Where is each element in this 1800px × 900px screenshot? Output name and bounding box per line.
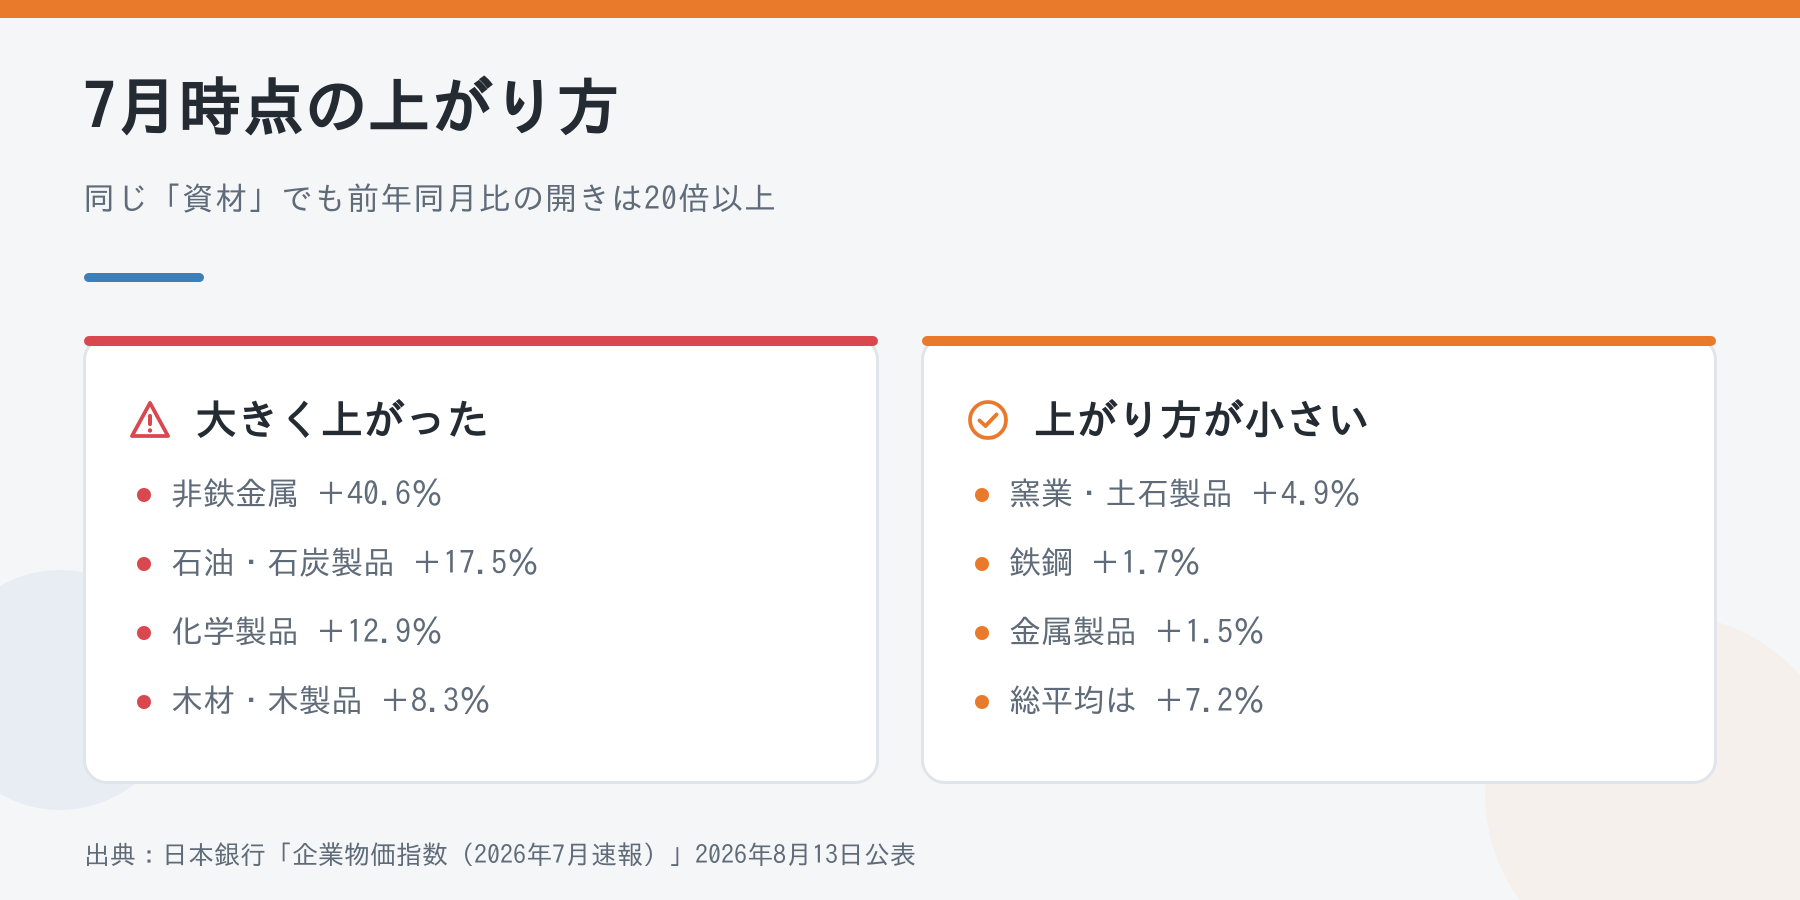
bullet xyxy=(136,695,150,709)
blue accent line xyxy=(84,273,204,282)
top accent bar xyxy=(0,0,1800,18)
item: non-ferrous metals: 非鉄金属 ＋40.6％ xyxy=(171,477,443,509)
item: chemicals: 化学製品 ＋12.9％ xyxy=(171,615,443,647)
bullet xyxy=(136,557,150,571)
icon: warning triangle xyxy=(130,401,170,438)
bullet xyxy=(136,626,150,640)
item: lumber and wood: 木材・木製品 ＋8.3％ xyxy=(171,684,491,716)
heading: small increases: 上がり方が小さい xyxy=(1034,399,1370,441)
item: overall average: 総平均は ＋7.2％ xyxy=(1009,684,1265,716)
source note: 出典：日本銀行「企業物価指数（2026年7月速報）」2026年8月13日公表 xyxy=(84,842,916,868)
title: 7月時点の上がり方 xyxy=(84,75,620,137)
card background xyxy=(921,336,1717,784)
bullet xyxy=(136,488,150,502)
red top bar xyxy=(84,336,878,346)
bullet xyxy=(974,488,988,502)
panel: large increases xyxy=(83,336,879,784)
bullet xyxy=(974,695,988,709)
item: ceramics: 窯業・土石製品 ＋4.9％ xyxy=(1009,477,1361,509)
orange top bar xyxy=(922,336,1716,346)
icon: check circle xyxy=(968,400,1008,440)
subtitle: 同じ「資材」でも前年同月比の開きは20倍以上 xyxy=(83,182,777,214)
item: metal products: 金属製品 ＋1.5％ xyxy=(1009,615,1265,647)
card background xyxy=(83,336,879,784)
heading: large increases: 大きく上がった xyxy=(195,399,489,441)
panel: small increases xyxy=(921,336,1717,784)
list: large increases xyxy=(137,477,539,716)
bullet xyxy=(974,557,988,571)
item: petroleum and coal: 石油・石炭製品 ＋17.5％ xyxy=(171,546,539,578)
bullet xyxy=(974,626,988,640)
item: steel: 鉄鋼 ＋1.7％ xyxy=(1009,546,1201,578)
list: small increases xyxy=(975,477,1361,716)
